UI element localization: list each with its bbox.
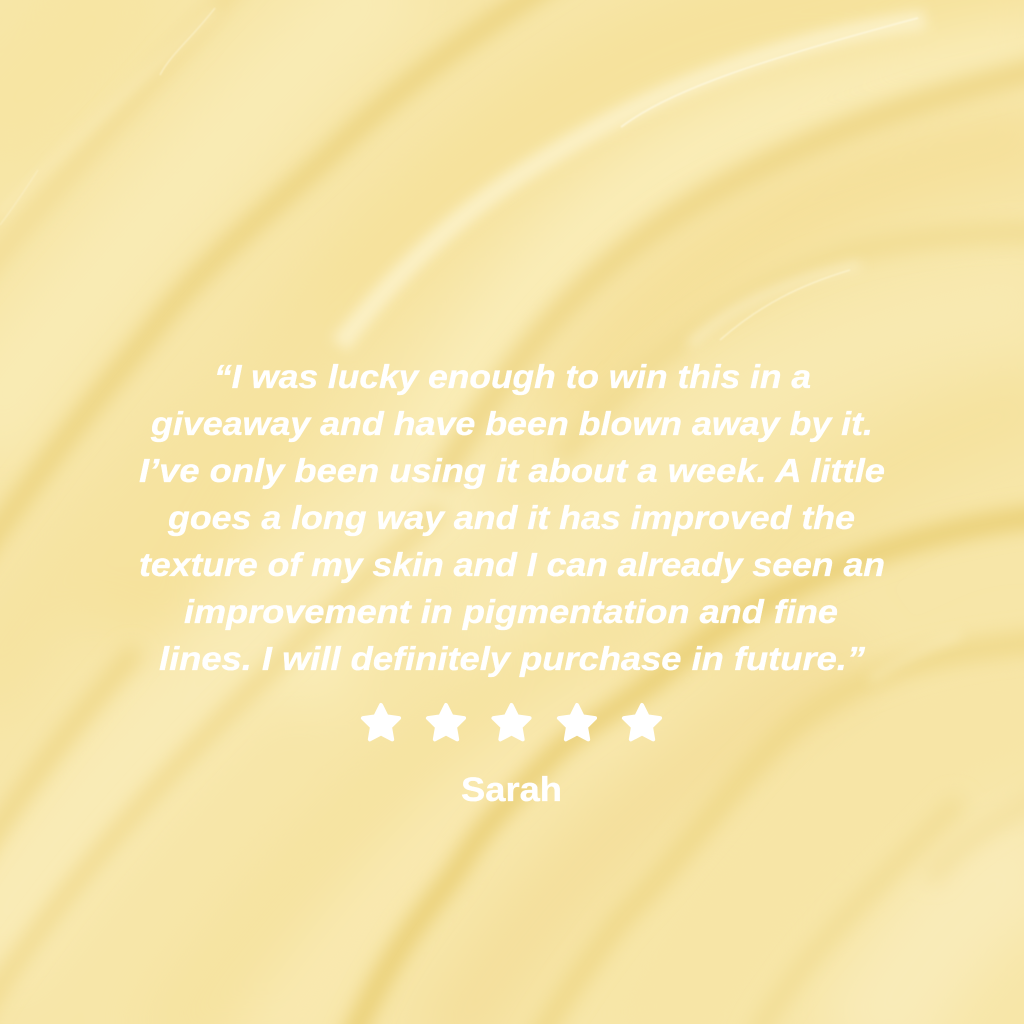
testimonial quote: texture of my skin and I can already seen an [139, 546, 885, 583]
icon: star 5 [624, 705, 660, 739]
testimonial quote: improvement in pigmentation and fine [184, 593, 838, 630]
testimonial quote: I’ve only been using it about a week. A little [139, 452, 885, 489]
icon: star 3 [493, 705, 530, 739]
reviewer name: Sarah [461, 771, 562, 809]
icon: star 1 [363, 705, 399, 739]
testimonial quote: “I was lucky enough to win this in a [214, 358, 811, 395]
five star rating [363, 705, 660, 739]
testimonial quote: giveaway and have been blown away by it. [150, 405, 873, 442]
testimonial quote [139, 358, 885, 677]
testimonial quote: goes a long way and it has improved the [167, 499, 855, 536]
testimonial quote: lines. I will definitely purchase in future.” [159, 640, 866, 677]
icon: star 2 [428, 705, 464, 739]
icon: star 4 [559, 705, 595, 739]
